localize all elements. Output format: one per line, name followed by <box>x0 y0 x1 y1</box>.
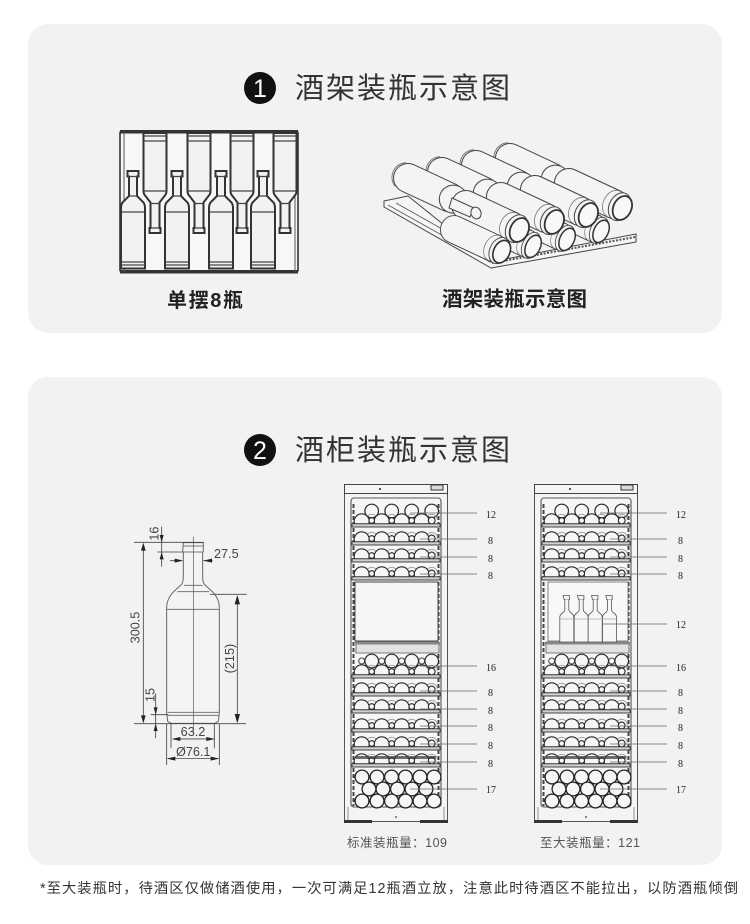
capacity labels: 8 <box>678 554 683 565</box>
compartment with bottles <box>548 582 628 642</box>
capacity labels: 8 <box>488 723 493 734</box>
dimension arrows <box>141 535 240 761</box>
caption: maximum capacity: 至大装瓶量：121 <box>540 836 640 850</box>
caption: standard capacity: 标准装瓶量：109 <box>347 836 447 850</box>
illustration: rack perspective with bottles <box>384 138 637 268</box>
capacity labels: 8 <box>678 706 683 717</box>
capacity labels: 8 <box>678 741 683 752</box>
label: rack loading diagram: 酒架装瓶示意图 <box>442 287 587 311</box>
footnote: *至大装瓶时，待酒区仅做储酒使用，一次可满足12瓶酒立放，注意此时待酒区不能拉出，以防酒瓶倾倒 <box>40 879 738 897</box>
dimension values: 27.5 <box>214 547 239 561</box>
capacity labels: 8 <box>488 706 493 717</box>
bottles: top layer front-facing <box>495 170 637 239</box>
capacity labels: 8 <box>488 759 493 770</box>
bottles: front row <box>448 192 534 268</box>
capacity labels <box>410 510 496 796</box>
bottle: lying with neck forward <box>387 158 472 218</box>
panel: wine rack loading <box>28 24 722 333</box>
capacity labels: 12 <box>486 510 496 521</box>
label: single layer 8 bottles: 单摆8瓶 <box>167 289 243 312</box>
capacity labels <box>600 510 686 796</box>
bottle outline <box>167 537 220 733</box>
capacity labels: 8 <box>678 723 683 734</box>
heading: section 2: 2 <box>253 437 267 465</box>
dimension lines <box>134 527 247 765</box>
capacity labels: 16 <box>676 663 686 674</box>
compartment <box>355 582 438 641</box>
capacity labels: 17 <box>676 785 686 796</box>
capacity labels: 8 <box>678 571 683 582</box>
capacity labels: 12 <box>676 510 686 521</box>
dimension values: (215) <box>223 644 237 673</box>
dimension values: 63.2 <box>181 725 205 739</box>
capacity labels: 17 <box>486 785 496 796</box>
panel: cabinet loading <box>28 377 722 865</box>
capacity labels: 8 <box>488 536 493 547</box>
heading: section 1: 酒架装瓶示意图 <box>295 72 510 105</box>
dimension values: 16 <box>147 527 161 541</box>
capacity labels: 8 <box>488 571 493 582</box>
capacity labels: 8 <box>678 759 683 770</box>
capacity labels: 8 <box>488 741 493 752</box>
illustration: rack top view with 8 bottles <box>120 130 298 274</box>
bottles: lower back row <box>484 199 613 262</box>
capacity labels: 16 <box>486 663 496 674</box>
capacity labels: 8 <box>488 554 493 565</box>
dimension values: 300.5 <box>128 612 142 643</box>
bottles: back-left facing <box>421 138 574 212</box>
capacity labels: 8 <box>678 536 683 547</box>
tray <box>384 196 636 268</box>
dimension values <box>128 527 239 759</box>
dimension values: Ø76.1 <box>176 745 210 759</box>
heading: section 2: 酒柜装瓶示意图 <box>295 434 510 467</box>
diagram: bottle dimensions <box>128 527 247 765</box>
capacity labels: 8 <box>488 688 493 699</box>
cabinet: standard capacity <box>344 484 496 823</box>
cabinet: maximum capacity <box>534 484 686 823</box>
capacity labels: 8 <box>678 688 683 699</box>
dimension values: 15 <box>143 688 157 702</box>
heading: section 1: 1 <box>253 75 267 103</box>
bottle neck <box>449 198 483 220</box>
capacity labels: 12 <box>676 620 686 631</box>
